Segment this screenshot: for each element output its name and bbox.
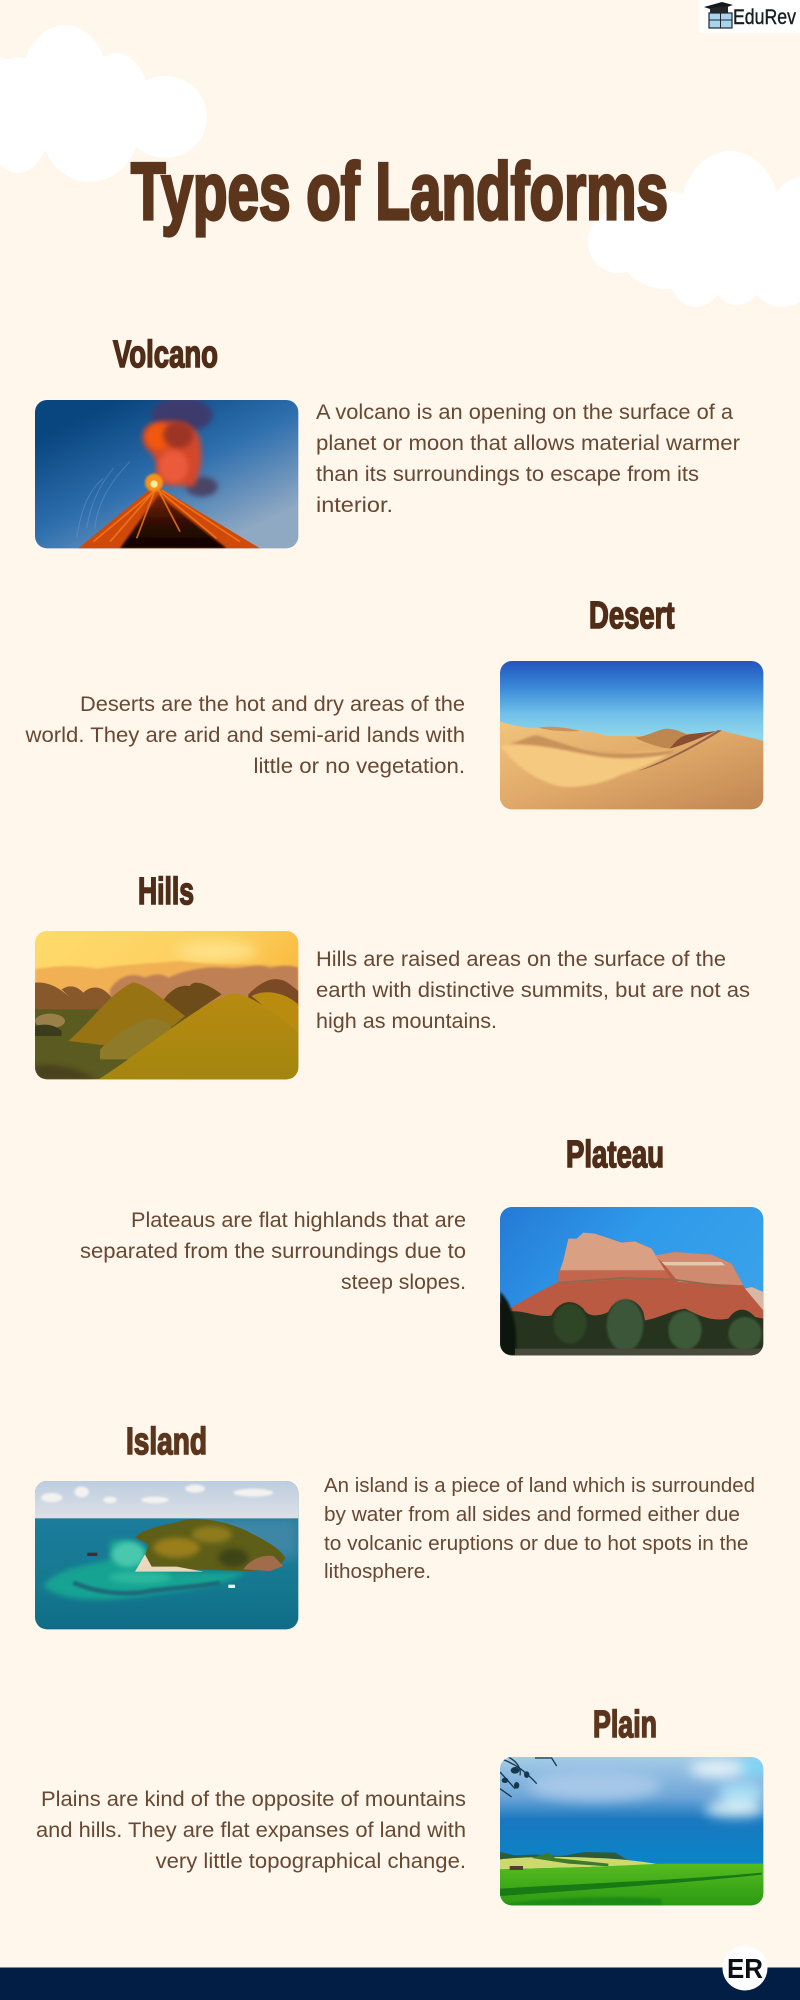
badge: ER: [722, 1946, 768, 1990]
heading: Desert: Desert: [589, 595, 675, 637]
image: plateau: [500, 1207, 764, 1356]
text: hills description: earth with distinctive summits, but are not as: [316, 979, 750, 1002]
image: hills: [35, 931, 298, 1080]
text: island description: lithosphere.: [324, 1561, 431, 1583]
text: plateau description: [80, 1209, 466, 1294]
text: volcano description: planet or moon that allows material warmer: [316, 432, 740, 455]
text: desert description: Deserts are the hot and dry areas of the: [80, 693, 465, 716]
heading: Plain: Plain: [593, 1704, 657, 1746]
text: hills description: [316, 948, 750, 1033]
heading: Volcano: Volcano: [113, 334, 218, 376]
text: volcano description: than its surroundings to escape from its: [316, 463, 699, 486]
text: plateau description: Plateaus are flat highlands that are: [131, 1209, 466, 1232]
text: desert description: [24, 693, 465, 778]
cloud: top right: [588, 151, 800, 307]
panel: island: [30, 1421, 755, 1636]
text: plateau description: steep slopes.: [341, 1271, 466, 1294]
text: volcano description: interior.: [316, 494, 393, 517]
text: plain description: [36, 1788, 466, 1873]
panel: volcano: [30, 334, 740, 555]
text: plain description: and hills. They are flat expanses of land with: [36, 1819, 466, 1842]
text: island description: to volcanic eruptions or due to hot spots in the: [324, 1533, 748, 1555]
panel: hills: [30, 871, 750, 1086]
badge: ER: ER: [727, 1953, 763, 1984]
footer bar: [0, 1968, 800, 2000]
text: plain description: very little topographical change.: [156, 1850, 466, 1873]
image: island: [35, 1481, 298, 1630]
image: desert: [500, 661, 764, 810]
text: plain description: Plains are kind of the opposite of mountains: [41, 1788, 466, 1811]
heading: Island: Island: [126, 1421, 207, 1463]
text: hills description: Hills are raised areas on the surface of the: [316, 948, 726, 971]
text: island description: An island is a piece of land which is surrounded: [324, 1475, 755, 1497]
panel: desert: [24, 595, 770, 816]
image: plain: [500, 1757, 764, 1906]
text: desert description: world. They are arid and semi-arid lands with: [24, 724, 465, 747]
heading: Plateau: Plateau: [566, 1134, 664, 1176]
image: volcano: [35, 400, 298, 548]
text: island description: by water from all sides and formed either due: [324, 1504, 740, 1526]
text: desert description: little or no vegetation.: [254, 755, 465, 778]
text: hills description: high as mountains.: [316, 1010, 497, 1033]
logo: EduRev: [699, 0, 800, 33]
text: volcano description: [316, 401, 740, 517]
panel: plain: [36, 1704, 772, 1912]
text: island description: [324, 1475, 755, 1583]
text: volcano description: A volcano is an opening on the surface of a: [316, 401, 733, 424]
heading: Hills: Hills: [138, 871, 194, 913]
icon: graduation cap and book: [704, 2, 733, 28]
text: plateau description: separated from the surroundings due to: [80, 1240, 466, 1263]
panel: plateau: [80, 1134, 770, 1362]
cloud: top left: [0, 25, 207, 182]
